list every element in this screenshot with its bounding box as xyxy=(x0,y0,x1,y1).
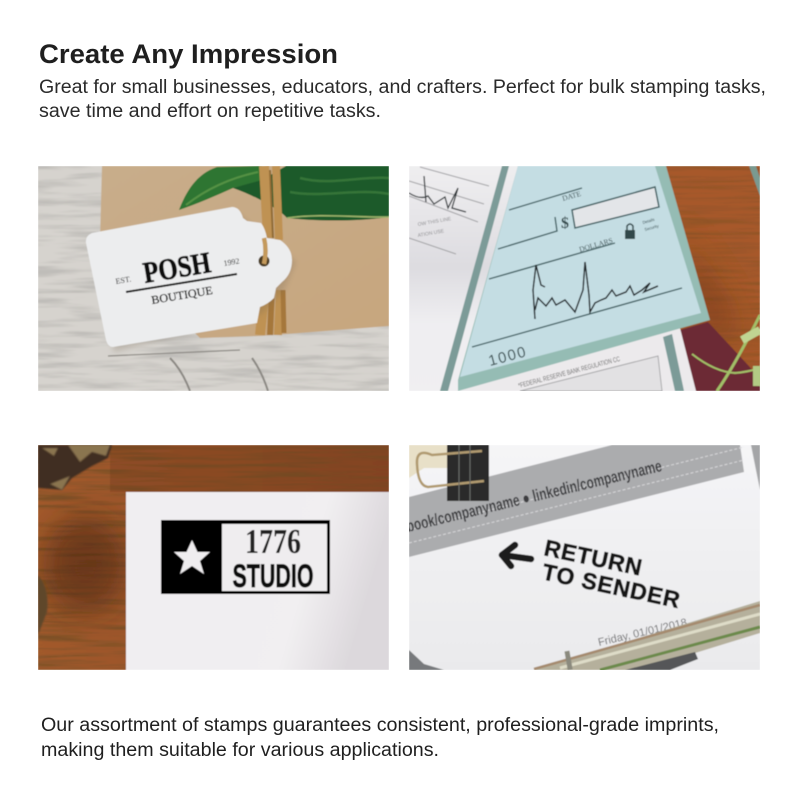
lock icon xyxy=(625,224,635,239)
pine cones xyxy=(38,445,112,635)
tag hole with twine xyxy=(258,238,270,266)
check labels: DOLLARS xyxy=(578,236,614,254)
binder clip xyxy=(409,445,489,501)
title: Create Any Impression xyxy=(39,39,338,69)
check labels: DATE xyxy=(561,189,582,203)
panel: signed check photo xyxy=(409,166,760,391)
intro text: save time and effort on repetitive tasks. xyxy=(39,101,381,122)
corner object xyxy=(409,650,444,670)
closing text: Our assortment of stamps guarantees consistent, professional-grade imprints, xyxy=(41,715,719,736)
signature xyxy=(533,262,658,319)
check labels: $ xyxy=(561,215,569,232)
POSH BOUTIQUE stamp xyxy=(115,252,240,305)
pen xyxy=(534,601,760,670)
plant xyxy=(692,315,760,391)
twine xyxy=(260,166,284,335)
wooden table xyxy=(666,166,760,370)
1776 studio stamp: STUDIO xyxy=(232,558,314,594)
date line: Friday, 01/01/2018 xyxy=(597,617,688,649)
panel: return to sender photo xyxy=(405,445,760,670)
corner of next sheet xyxy=(751,445,760,490)
kraft paper box xyxy=(100,166,389,338)
bottom sheet xyxy=(456,328,696,391)
grey band: book/companyname ● linkedin/companyname xyxy=(405,457,664,536)
1776 studio stamp xyxy=(161,520,330,594)
POSH BOUTIQUE stamp: EST. xyxy=(115,275,132,286)
check xyxy=(458,166,710,391)
return to sender stamp xyxy=(543,539,680,609)
panel: 1776 studio photo xyxy=(38,445,389,670)
under sheet with signature xyxy=(409,166,522,391)
white letter xyxy=(409,445,760,670)
white tag xyxy=(86,207,292,347)
closing text xyxy=(41,715,719,761)
check labels: 1000 xyxy=(487,343,529,370)
POSH BOUTIQUE stamp: 1992 xyxy=(223,256,240,268)
white paper xyxy=(126,492,389,670)
panel: gift tag photo xyxy=(38,166,389,391)
closing text: making them suitable for various applications. xyxy=(41,740,439,761)
intro text: Great for small businesses, educators, and crafters. Perfect for bulk stamping tasks, xyxy=(39,77,766,98)
star icon xyxy=(174,540,210,574)
check labels: Details xyxy=(642,217,655,225)
check labels: Security xyxy=(644,223,659,232)
intro text xyxy=(39,77,766,122)
POSH BOUTIQUE stamp: POSH xyxy=(141,246,213,290)
weathered wood background xyxy=(38,166,389,391)
1776 studio stamp: 1776 xyxy=(245,522,301,561)
wood table xyxy=(38,445,389,670)
under sheet with signature: ATION USE xyxy=(417,228,445,239)
under sheet with signature: OW THIS LINE xyxy=(417,216,452,228)
amount box xyxy=(572,187,659,228)
bottom sheet: *FEDERAL RESERVE BANK REGULATION CC xyxy=(518,356,621,390)
return to sender stamp: TO SENDER xyxy=(540,558,683,613)
burgundy envelope xyxy=(680,322,760,391)
green leaves xyxy=(179,166,389,220)
POSH BOUTIQUE stamp: BOUTIQUE xyxy=(151,285,214,307)
shadow of tag xyxy=(112,258,296,353)
arrow xyxy=(502,545,531,566)
check labels xyxy=(487,189,659,370)
return to sender stamp: RETURN xyxy=(542,534,644,580)
